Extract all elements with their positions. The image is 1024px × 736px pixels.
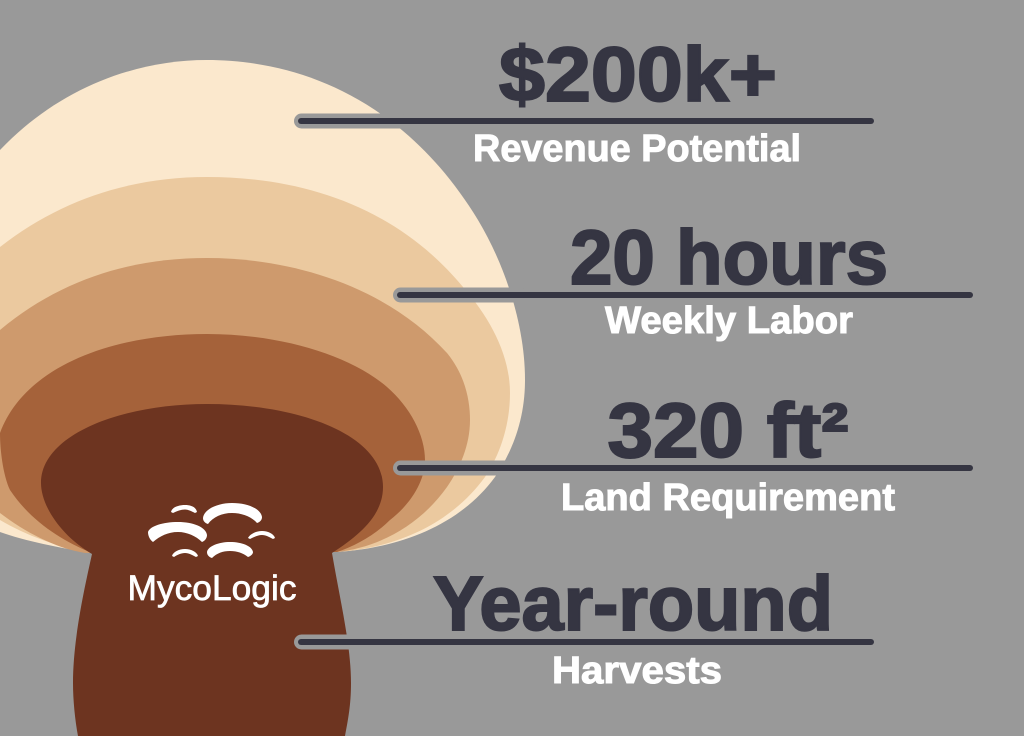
leader line xyxy=(301,114,871,128)
cap layer 2 xyxy=(0,177,510,553)
stat: harvests xyxy=(301,561,871,692)
logo wordmark: MycoLogic xyxy=(128,569,296,608)
logo icon: mushroom caps xyxy=(148,503,275,558)
cap layer 4 xyxy=(0,334,425,553)
stat: land requirement xyxy=(400,388,970,519)
leader line xyxy=(400,288,970,302)
leader line xyxy=(301,634,871,650)
label: Revenue Potential xyxy=(473,128,801,170)
mushroom illustration xyxy=(0,60,525,736)
label: Land Requirement xyxy=(561,477,895,519)
value: $200k+ xyxy=(499,32,777,118)
stat: weekly labor xyxy=(400,215,970,342)
leader line xyxy=(400,460,970,476)
value: 320 ft² xyxy=(608,388,848,474)
label: Harvests xyxy=(552,650,722,692)
value: Year-round xyxy=(433,561,833,647)
logo: MycoLogic xyxy=(128,503,296,608)
label: Weekly Labor xyxy=(605,300,853,342)
stat: revenue potential xyxy=(301,32,871,170)
cap layer 1 xyxy=(0,60,525,553)
stem and inner cap xyxy=(41,404,383,736)
cap layer 3 xyxy=(0,258,470,553)
value: 20 hours xyxy=(570,215,888,301)
